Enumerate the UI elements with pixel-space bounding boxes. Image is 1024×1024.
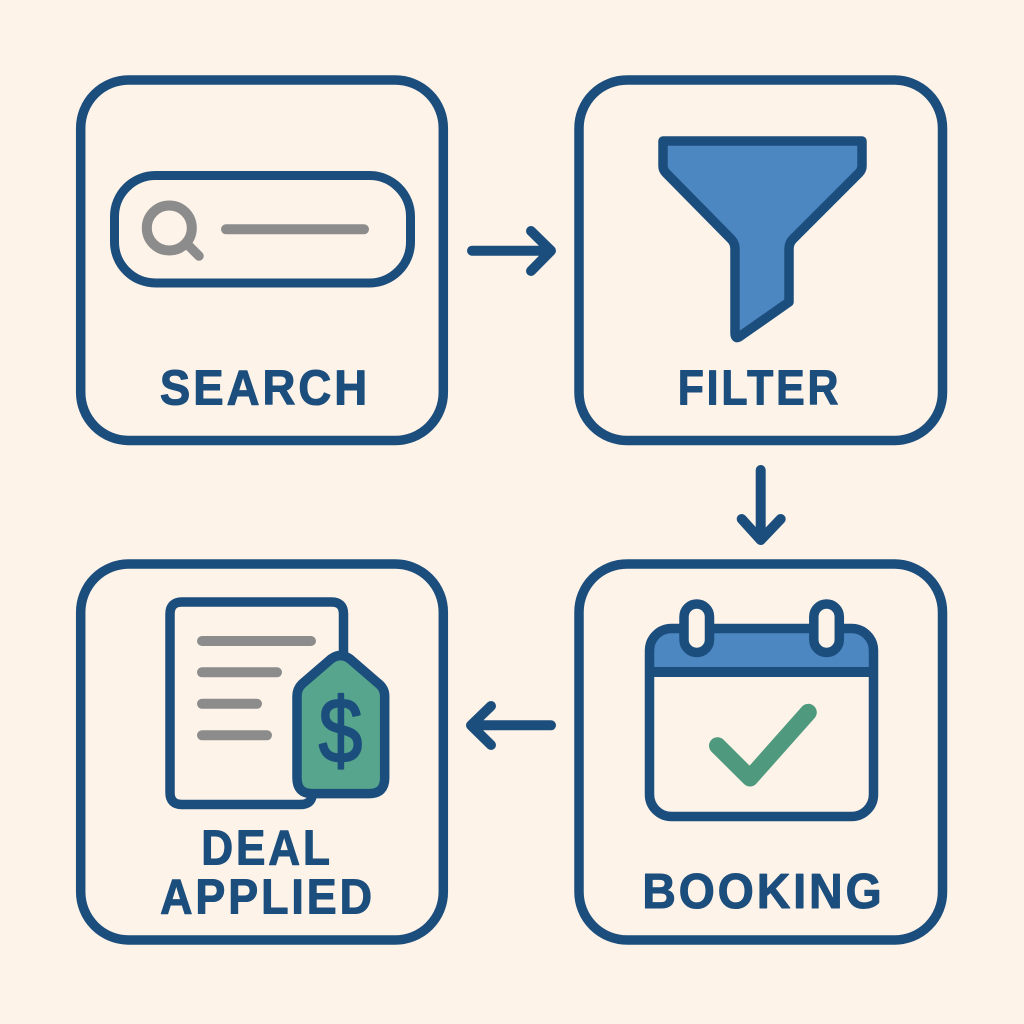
icon: check mark bbox=[718, 712, 808, 778]
panel: search bbox=[81, 80, 443, 440]
icon: price tag: $ bbox=[319, 680, 362, 782]
calendar rings bbox=[684, 604, 839, 652]
arrow: filter to booking bbox=[742, 470, 781, 540]
panel: filter bbox=[579, 80, 942, 440]
label: filter: FILTER bbox=[678, 360, 841, 415]
icon: price tag bbox=[297, 656, 385, 794]
label: deal applied: DEAL bbox=[201, 820, 333, 875]
arrow: search to filter bbox=[472, 231, 551, 271]
arrow: booking to deal applied bbox=[471, 706, 551, 745]
icon: calendar bbox=[650, 604, 874, 816]
label: deal applied bbox=[160, 820, 375, 924]
search bar bbox=[114, 176, 410, 283]
label: search: SEARCH bbox=[160, 361, 370, 416]
label: booking: BOOKING bbox=[642, 865, 885, 919]
label: deal applied: APPLIED bbox=[160, 869, 375, 924]
panel: booking bbox=[579, 564, 942, 940]
icon: funnel bbox=[663, 141, 862, 338]
icon: document with price tag bbox=[170, 602, 385, 804]
panel: deal applied bbox=[81, 564, 443, 940]
